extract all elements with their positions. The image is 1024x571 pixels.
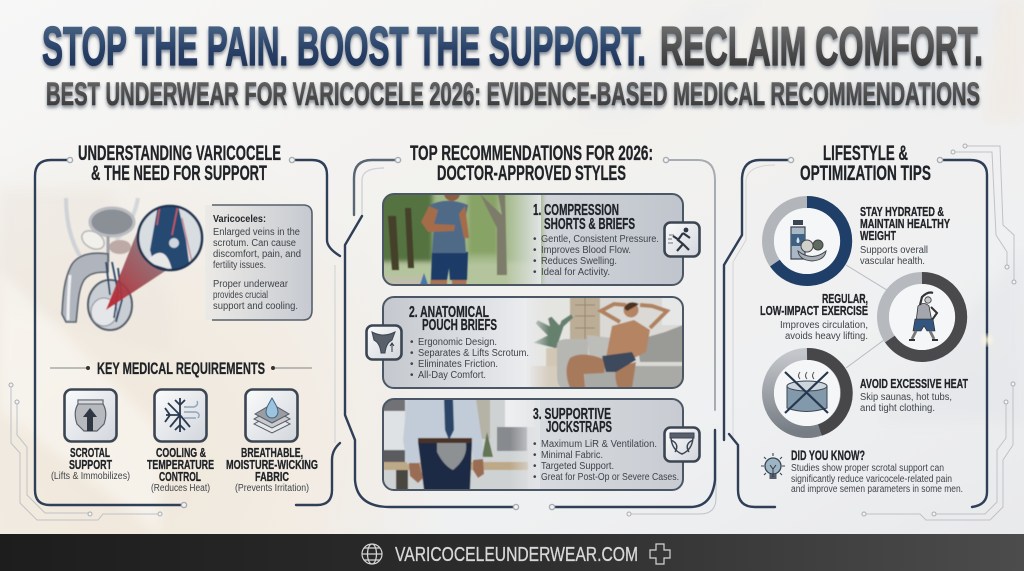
- key medical requirements heading: KEY MEDICAL REQUIREMENTS: [97, 359, 265, 378]
- card 3: supportive jockstraps: Minimal Fabric.: [541, 450, 603, 461]
- tip: exercise: avoids heavy lifting.: [785, 331, 868, 342]
- card 1: compression shorts: 1. COMPRESSION: [533, 202, 619, 219]
- heading: LIFESTYLE &: [823, 142, 908, 165]
- scrotal support label: [51, 445, 130, 482]
- heading: UNDERSTANDING VARICOCELE: [78, 142, 281, 165]
- heading: DOCTOR-APPROVED STYLES: [437, 162, 626, 185]
- ring: exercise: [883, 278, 961, 356]
- tip: stay hydrated: MAINTAIN HEALTHY: [860, 216, 950, 231]
- card 3: supportive jockstraps: Maximum LiR & Ventilation.: [541, 439, 657, 450]
- icon: scrotal support: [64, 390, 116, 442]
- card 2: anatomical pouch briefs: [366, 297, 683, 388]
- breathable label: (Prevents Irritation): [235, 483, 309, 494]
- heading: OPTIMIZATION TIPS: [800, 162, 931, 185]
- heading: [800, 142, 931, 185]
- callout: varicoceles: discomfort, pain, and: [213, 249, 301, 260]
- icon: runner: [664, 222, 700, 256]
- panel frame: [35, 157, 340, 508]
- panel: understanding varicocele: [35, 142, 340, 508]
- tip: stay hydrated: [860, 204, 950, 267]
- callout: varicoceles: Enlarged veins in the: [213, 227, 300, 238]
- card 3: supportive jockstraps: 3. SUPPORTIVE: [533, 406, 611, 423]
- card 1: compression shorts: Gentle, Consistent Pressure.: [541, 234, 659, 245]
- card 2: anatomical pouch briefs: •: [410, 359, 414, 370]
- card 2: anatomical pouch briefs: •: [410, 348, 414, 359]
- footer bar: [0, 534, 1024, 571]
- card 2: anatomical pouch briefs: •: [410, 370, 414, 381]
- did you know: DID YOU KNOW?: [791, 448, 865, 463]
- card 2: anatomical pouch briefs: 2. ANATOMICAL: [409, 304, 489, 321]
- card 2: anatomical pouch briefs: Eliminates Friction.: [418, 359, 498, 370]
- breathable label: MOISTURE-WICKING: [226, 457, 318, 472]
- callout: varicoceles: Varicoceles:: [213, 214, 266, 225]
- cooling label: TEMPERATURE: [147, 457, 214, 472]
- callout: varicoceles: fertility issues.: [213, 260, 266, 271]
- tip: stay hydrated: WEIGHT: [860, 228, 896, 243]
- card 2: anatomical pouch briefs: •: [410, 337, 414, 348]
- icon: cooling: [154, 390, 206, 442]
- scrotal support label: (Lifts & Immobilizes): [51, 471, 130, 482]
- card 3: supportive jockstraps: Targeted Support.: [541, 461, 614, 472]
- photo: man on sofa: [527, 297, 683, 388]
- card 1: compression shorts: Reduces Swelling.: [541, 256, 617, 267]
- cooling label: COOLING &: [156, 445, 206, 460]
- icon: globe: [362, 544, 382, 564]
- tip: stay hydrated: Supports overall: [860, 245, 928, 256]
- icon: breathable fabric: [246, 390, 298, 442]
- circuit decorations: [9, 144, 1016, 520]
- tip: stay hydrated: STAY HYDRATED &: [860, 204, 944, 219]
- tip: exercise: Improves circulation,: [780, 320, 868, 331]
- tip: avoid heat: and tight clothing.: [860, 403, 935, 414]
- tip: exercise: [760, 291, 868, 342]
- icon: stretching figure: [909, 292, 938, 340]
- card 2: anatomical pouch briefs: All-Day Comfort.: [418, 370, 486, 381]
- photo: man in shirt and tie: [383, 399, 540, 490]
- card 1: compression shorts: Improves Blood Flow.: [541, 245, 631, 256]
- card 3: supportive jockstraps: •: [533, 472, 537, 483]
- callout: varicoceles: scrotum. Can cause: [213, 238, 296, 249]
- card 3: supportive jockstraps: JOCKSTRAPS: [546, 419, 612, 436]
- did you know: and improve semen parameters in some men.: [791, 484, 963, 495]
- card 3: supportive jockstraps: Great for Post-Op or Severe Cases.: [541, 472, 679, 483]
- tip: avoid heat: Skip saunas, hot tubs,: [860, 392, 952, 403]
- panel: top recommendations: [345, 142, 715, 510]
- callout: varicoceles: [205, 205, 312, 320]
- breathable label: [226, 445, 318, 494]
- card 2: anatomical pouch briefs: Ergonomic Design.: [418, 337, 497, 348]
- did you know: significantly reduce varicocele-related pain: [791, 474, 952, 485]
- panel frame: [345, 157, 715, 510]
- did you know: Studies show proper scrotal support can: [791, 463, 944, 474]
- card 1: compression shorts: •: [533, 234, 537, 245]
- tip: avoid heat: AVOID EXCESSIVE HEAT: [860, 376, 968, 391]
- photo: runner in park: [384, 195, 546, 284]
- tip: stay hydrated: vascular health.: [860, 256, 925, 267]
- card 2: anatomical pouch briefs: Separates & Lifts Scrotum.: [418, 348, 529, 359]
- panel frame: [724, 157, 992, 507]
- heading: TOP RECOMMENDATIONS FOR 2026:: [410, 142, 653, 165]
- ring: hydration: [768, 202, 846, 280]
- tip: exercise: REGULAR,: [822, 291, 868, 306]
- card 3: supportive jockstraps: •: [533, 461, 537, 472]
- icon: jockstrap: [664, 428, 700, 462]
- callout: varicoceles: Proper underwear: [213, 279, 289, 290]
- callout: varicoceles: support and cooling.: [213, 301, 298, 312]
- icon: crossed hot tub: [785, 372, 828, 413]
- heading: [78, 142, 281, 185]
- icon: light bulb: [761, 453, 785, 479]
- breathable label: BREATHABLE,: [241, 445, 303, 460]
- anatomy illustration: [62, 198, 202, 330]
- heading: & THE NEED FOR SUPPORT: [91, 162, 267, 185]
- connectors: [846, 265, 890, 368]
- panel: lifestyle tips: [724, 142, 992, 507]
- cooling label: CONTROL: [159, 469, 201, 484]
- card 1: compression shorts: SHORTS & BRIEFS: [544, 216, 635, 233]
- breathable label: FABRIC: [255, 469, 289, 484]
- card 2: anatomical pouch briefs: POUCH BRIEFS: [422, 317, 497, 334]
- website url: VARICOCELEUNDERWEAR.COM: [395, 544, 638, 566]
- callout: varicoceles: provides crucial: [213, 290, 268, 301]
- card 1: compression shorts: •: [533, 256, 537, 267]
- scrotal support label: SUPPORT: [69, 457, 112, 472]
- card 3: supportive jockstraps: •: [533, 450, 537, 461]
- card 1: compression shorts: •: [533, 245, 537, 256]
- icon: medical plus: [650, 544, 670, 564]
- cooling label: [147, 445, 214, 494]
- cooling label: (Reduces Heat): [151, 483, 210, 494]
- ring: heat: [768, 354, 847, 432]
- tip: exercise: LOW-IMPACT EXERCISE: [760, 303, 868, 318]
- icon: bottle and bowl: [791, 220, 826, 261]
- card 3: supportive jockstraps: •: [533, 439, 537, 450]
- card 1: compression shorts: •: [533, 267, 537, 278]
- card 3: supportive jockstraps: [383, 399, 700, 490]
- card 1: compression shorts: Ideal for Activity.: [541, 267, 610, 278]
- tip: avoid heat: [860, 376, 968, 414]
- heading: [410, 142, 653, 185]
- card 1: compression shorts: [382, 193, 701, 286]
- did you know: [791, 448, 963, 495]
- icon: briefs: [366, 326, 402, 360]
- scrotal support label: SCROTAL: [70, 445, 110, 460]
